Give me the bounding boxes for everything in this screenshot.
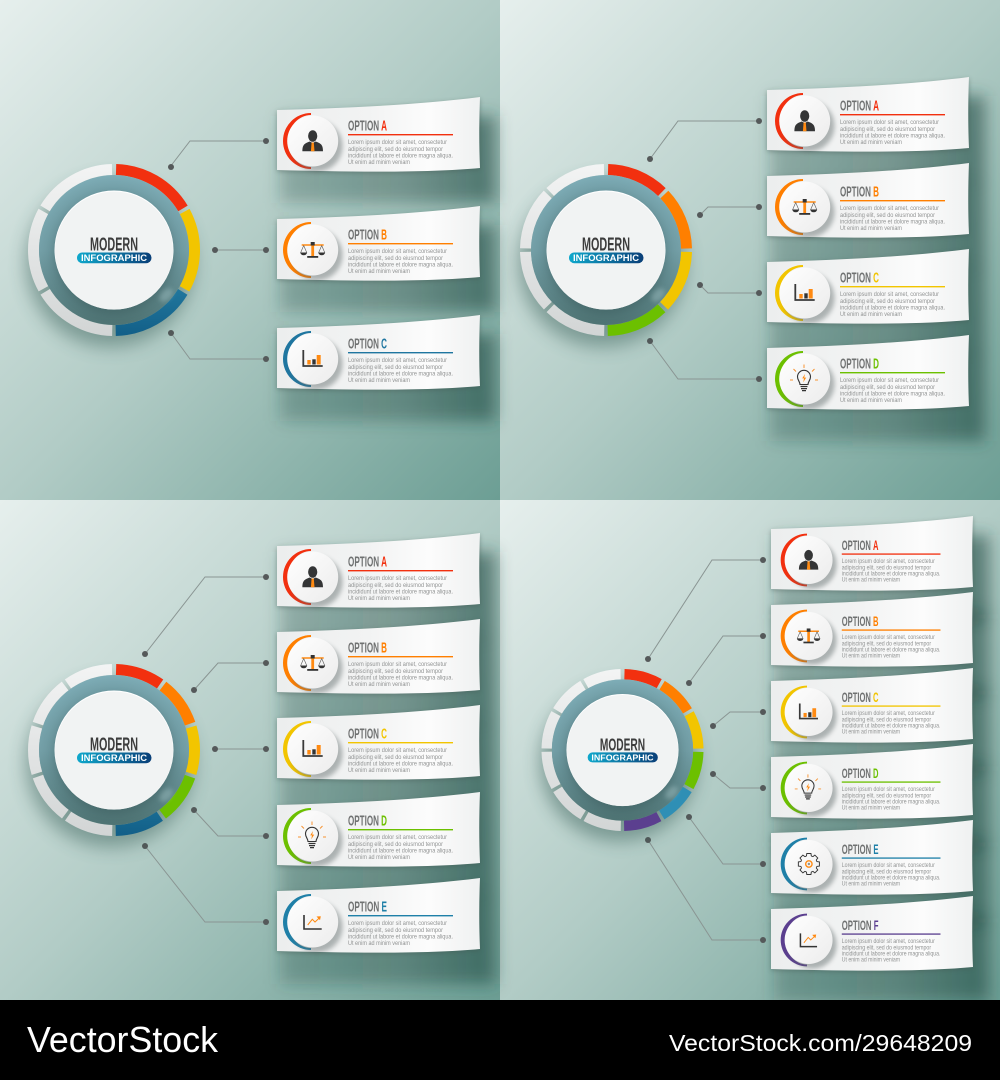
card: Option A: OPTION A bbox=[842, 538, 879, 553]
card: Option B: Ut enim ad minim veniam bbox=[348, 681, 410, 688]
card: Option B: adipiscing elit, sed do eiusmod tempor bbox=[348, 668, 444, 675]
card: Option B bbox=[767, 163, 969, 239]
hub circle: MODERN bbox=[90, 734, 138, 755]
card: Option A: OPTION A bbox=[348, 118, 387, 134]
card: Option D: adipiscing elit, sed do eiusmod tempor bbox=[348, 841, 444, 848]
hub circle: MODERN bbox=[600, 735, 645, 755]
card: Option E bbox=[277, 878, 480, 954]
card: Option B: Lorem ipsum dolor sit amet, consectetur bbox=[348, 248, 448, 255]
card: Option B: Ut enim ad minim veniam bbox=[348, 268, 410, 275]
card: Option C: adipiscing elit, sed do eiusmod tempor bbox=[842, 717, 931, 723]
card: Option B: Lorem ipsum dolor sit amet, consectetur bbox=[840, 205, 940, 212]
card: Option D: Ut enim ad minim veniam bbox=[840, 397, 902, 404]
hub circle: INFOGRAPHIC bbox=[81, 753, 148, 763]
card: Option C: incididunt ut labore et dolore magna aliqua. bbox=[840, 304, 945, 312]
card: Option B: OPTION B bbox=[840, 184, 879, 200]
background: panel 4 bbox=[500, 500, 1000, 1000]
card: Option A: OPTION A bbox=[348, 554, 387, 570]
card: Option B: Lorem ipsum dolor sit amet, consectetur bbox=[348, 661, 448, 668]
hub circle: MODERN bbox=[582, 234, 630, 255]
card: Option D bbox=[277, 792, 480, 868]
card: Option A: adipiscing elit, sed do eiusmod tempor bbox=[348, 146, 444, 153]
card: Option D bbox=[767, 335, 969, 411]
card: Option A: Lorem ipsum dolor sit amet, consectetur bbox=[842, 559, 935, 565]
card: Option D: Ut enim ad minim veniam bbox=[842, 806, 900, 812]
card: Option E bbox=[771, 820, 973, 896]
card: Option D: Lorem ipsum dolor sit amet, consectetur bbox=[840, 377, 940, 384]
card: Option E: OPTION E bbox=[348, 899, 387, 915]
card: Option C: incididunt ut labore et dolore magna aliqua. bbox=[348, 760, 453, 768]
connectors bbox=[645, 557, 766, 943]
card: Option D: incididunt ut labore et dolore magna aliqua. bbox=[348, 848, 453, 854]
card: Option D: Ut enim ad minim veniam bbox=[348, 854, 410, 861]
card: Option E: adipiscing elit, sed do eiusmod tempor bbox=[348, 927, 444, 934]
card: Option A: OPTION A bbox=[840, 98, 879, 114]
hub circle: INFOGRAPHIC bbox=[573, 253, 640, 263]
card shadows bbox=[280, 116, 495, 421]
card: Option F: Lorem ipsum dolor sit amet, consectetur bbox=[842, 939, 935, 945]
card: Option D: adipiscing elit, sed do eiusmod tempor bbox=[840, 384, 936, 391]
card: Option C: Lorem ipsum dolor sit amet, consectetur bbox=[348, 747, 448, 754]
card: Option B: adipiscing elit, sed do eiusmod tempor bbox=[348, 255, 444, 262]
card: Option F: incididunt ut labore et dolore magna aliqua. bbox=[842, 952, 941, 958]
hub circle bbox=[26, 170, 194, 347]
card: Option E: adipiscing elit, sed do eiusmod tempor bbox=[842, 869, 931, 875]
card: Option C: OPTION C bbox=[842, 690, 879, 705]
card: Option D: Lorem ipsum dolor sit amet, consectetur bbox=[842, 787, 935, 793]
card: Option C: incididunt ut labore et dolore magna aliqua. bbox=[842, 724, 941, 730]
card: Option B: adipiscing elit, sed do eiusmod tempor bbox=[842, 641, 931, 647]
panel: three options bbox=[26, 97, 495, 421]
card: Option C: Lorem ipsum dolor sit amet, consectetur bbox=[840, 291, 940, 298]
card: Option D: incididunt ut labore et dolore magna aliqua. bbox=[842, 800, 941, 806]
footer logo text: VectorStock bbox=[27, 1019, 219, 1060]
card: Option A bbox=[771, 516, 973, 592]
card: Option D: incididunt ut labore et dolore magna aliqua. bbox=[840, 390, 945, 398]
card: Option B: Lorem ipsum dolor sit amet, consectetur bbox=[842, 635, 935, 641]
card: Option B: Ut enim ad minim veniam bbox=[842, 654, 900, 660]
hub circle: MODERN bbox=[90, 234, 138, 255]
card: Option A bbox=[277, 533, 480, 609]
card: Option C: adipiscing elit, sed do eiusmod tempor bbox=[840, 298, 936, 305]
card: Option C: adipiscing elit, sed do eiusmod tempor bbox=[348, 754, 444, 761]
background: panel 3 bbox=[0, 500, 500, 1000]
card: Option A: Lorem ipsum dolor sit amet, consectetur bbox=[348, 139, 448, 146]
card: Option F: Ut enim ad minim veniam bbox=[842, 958, 900, 964]
card: Option F bbox=[771, 896, 973, 972]
card: Option D bbox=[771, 744, 973, 820]
card: Option C bbox=[767, 249, 969, 325]
card shadows bbox=[770, 96, 985, 441]
card: Option B bbox=[277, 619, 480, 695]
card: Option A: incididunt ut labore et dolore magna aliqua. bbox=[840, 132, 945, 140]
card: Option A bbox=[767, 77, 969, 153]
card: Option F: OPTION F bbox=[842, 918, 878, 933]
card: Option D: OPTION D bbox=[842, 766, 879, 781]
card: Option B bbox=[277, 206, 480, 282]
card: Option E: OPTION E bbox=[842, 842, 878, 857]
card: Option B: OPTION B bbox=[348, 227, 387, 243]
card shadows bbox=[774, 535, 989, 1002]
card: Option C bbox=[771, 668, 973, 744]
card: Option A: Ut enim ad minim veniam bbox=[840, 139, 902, 146]
connectors bbox=[647, 118, 762, 382]
card: Option A: Lorem ipsum dolor sit amet, consectetur bbox=[348, 575, 448, 582]
card: Option B: incididunt ut labore et dolore magna aliqua. bbox=[840, 218, 945, 226]
card: Option A: adipiscing elit, sed do eiusmod tempor bbox=[348, 582, 444, 589]
background: panel 1 bbox=[0, 0, 500, 500]
connectors bbox=[168, 138, 269, 362]
card: Option A: adipiscing elit, sed do eiusmod tempor bbox=[842, 565, 931, 571]
panel: six options bbox=[540, 516, 989, 1002]
card: Option C: OPTION C bbox=[840, 270, 879, 286]
card: Option C: Ut enim ad minim veniam bbox=[842, 730, 900, 736]
card: Option A: incididunt ut labore et dolore magna aliqua. bbox=[348, 588, 453, 596]
card: Option E: Ut enim ad minim veniam bbox=[842, 882, 900, 888]
footer image id: VectorStock.com/29648209 bbox=[669, 1030, 972, 1056]
card: Option B: adipiscing elit, sed do eiusmod tempor bbox=[840, 212, 936, 219]
card: Option C bbox=[277, 315, 480, 391]
card: Option B: OPTION B bbox=[842, 614, 879, 629]
hub circle bbox=[540, 674, 698, 841]
card: Option A: adipiscing elit, sed do eiusmod tempor bbox=[840, 126, 936, 133]
card: Option A bbox=[277, 97, 480, 173]
connectors bbox=[142, 574, 269, 925]
hub circle: INFOGRAPHIC bbox=[591, 753, 654, 763]
card: Option F: adipiscing elit, sed do eiusmod tempor bbox=[842, 945, 931, 951]
card: Option A: incididunt ut labore et dolore magna aliqua. bbox=[842, 572, 941, 578]
card: Option B bbox=[771, 592, 973, 668]
card: Option C: OPTION C bbox=[348, 726, 387, 742]
card: Option A: Ut enim ad minim veniam bbox=[348, 159, 410, 166]
card: Option A: Lorem ipsum dolor sit amet, consectetur bbox=[840, 119, 940, 126]
card: Option D: OPTION D bbox=[348, 813, 387, 829]
footer bar bbox=[0, 1000, 1000, 1080]
card shadows bbox=[280, 552, 495, 984]
card: Option A: Ut enim ad minim veniam bbox=[348, 595, 410, 602]
card: Option C: Lorem ipsum dolor sit amet, consectetur bbox=[348, 357, 448, 364]
card: Option E: incididunt ut labore et dolore magna aliqua. bbox=[348, 934, 453, 940]
card: Option B: Ut enim ad minim veniam bbox=[840, 225, 902, 232]
card: Option E: incididunt ut labore et dolore magna aliqua. bbox=[842, 876, 941, 882]
card: Option C: Lorem ipsum dolor sit amet, consectetur bbox=[842, 711, 935, 717]
card: Option D: adipiscing elit, sed do eiusmod tempor bbox=[842, 793, 931, 799]
background: panel 2 bbox=[500, 0, 1000, 500]
panel: four options bbox=[518, 77, 985, 441]
card: Option D: OPTION D bbox=[840, 356, 879, 372]
hub circle bbox=[518, 170, 686, 347]
card: Option B: incididunt ut labore et dolore magna aliqua. bbox=[842, 648, 941, 654]
card: Option E: Lorem ipsum dolor sit amet, consectetur bbox=[842, 863, 935, 869]
card: Option E: Ut enim ad minim veniam bbox=[348, 940, 410, 947]
card: Option B: incididunt ut labore et dolore magna aliqua. bbox=[348, 262, 453, 268]
hub circle bbox=[26, 670, 194, 847]
hub circle: INFOGRAPHIC bbox=[81, 253, 148, 263]
card: Option C: adipiscing elit, sed do eiusmod tempor bbox=[348, 364, 444, 371]
card: Option B: incididunt ut labore et dolore magna aliqua. bbox=[348, 674, 453, 682]
card: Option C: Ut enim ad minim veniam bbox=[348, 377, 410, 384]
card: Option C: Ut enim ad minim veniam bbox=[348, 767, 410, 774]
card: Option C: incididunt ut labore et dolore magna aliqua. bbox=[348, 370, 453, 378]
card: Option B: OPTION B bbox=[348, 640, 387, 656]
card: Option E: Lorem ipsum dolor sit amet, consectetur bbox=[348, 920, 448, 927]
card: Option C bbox=[277, 705, 480, 781]
card: Option A: incididunt ut labore et dolore magna aliqua. bbox=[348, 152, 453, 160]
card: Option C: OPTION C bbox=[348, 336, 387, 352]
panel: five options bbox=[26, 533, 495, 984]
card: Option D: Lorem ipsum dolor sit amet, consectetur bbox=[348, 834, 448, 841]
card: Option A: Ut enim ad minim veniam bbox=[842, 578, 900, 584]
card: Option C: Ut enim ad minim veniam bbox=[840, 311, 902, 318]
